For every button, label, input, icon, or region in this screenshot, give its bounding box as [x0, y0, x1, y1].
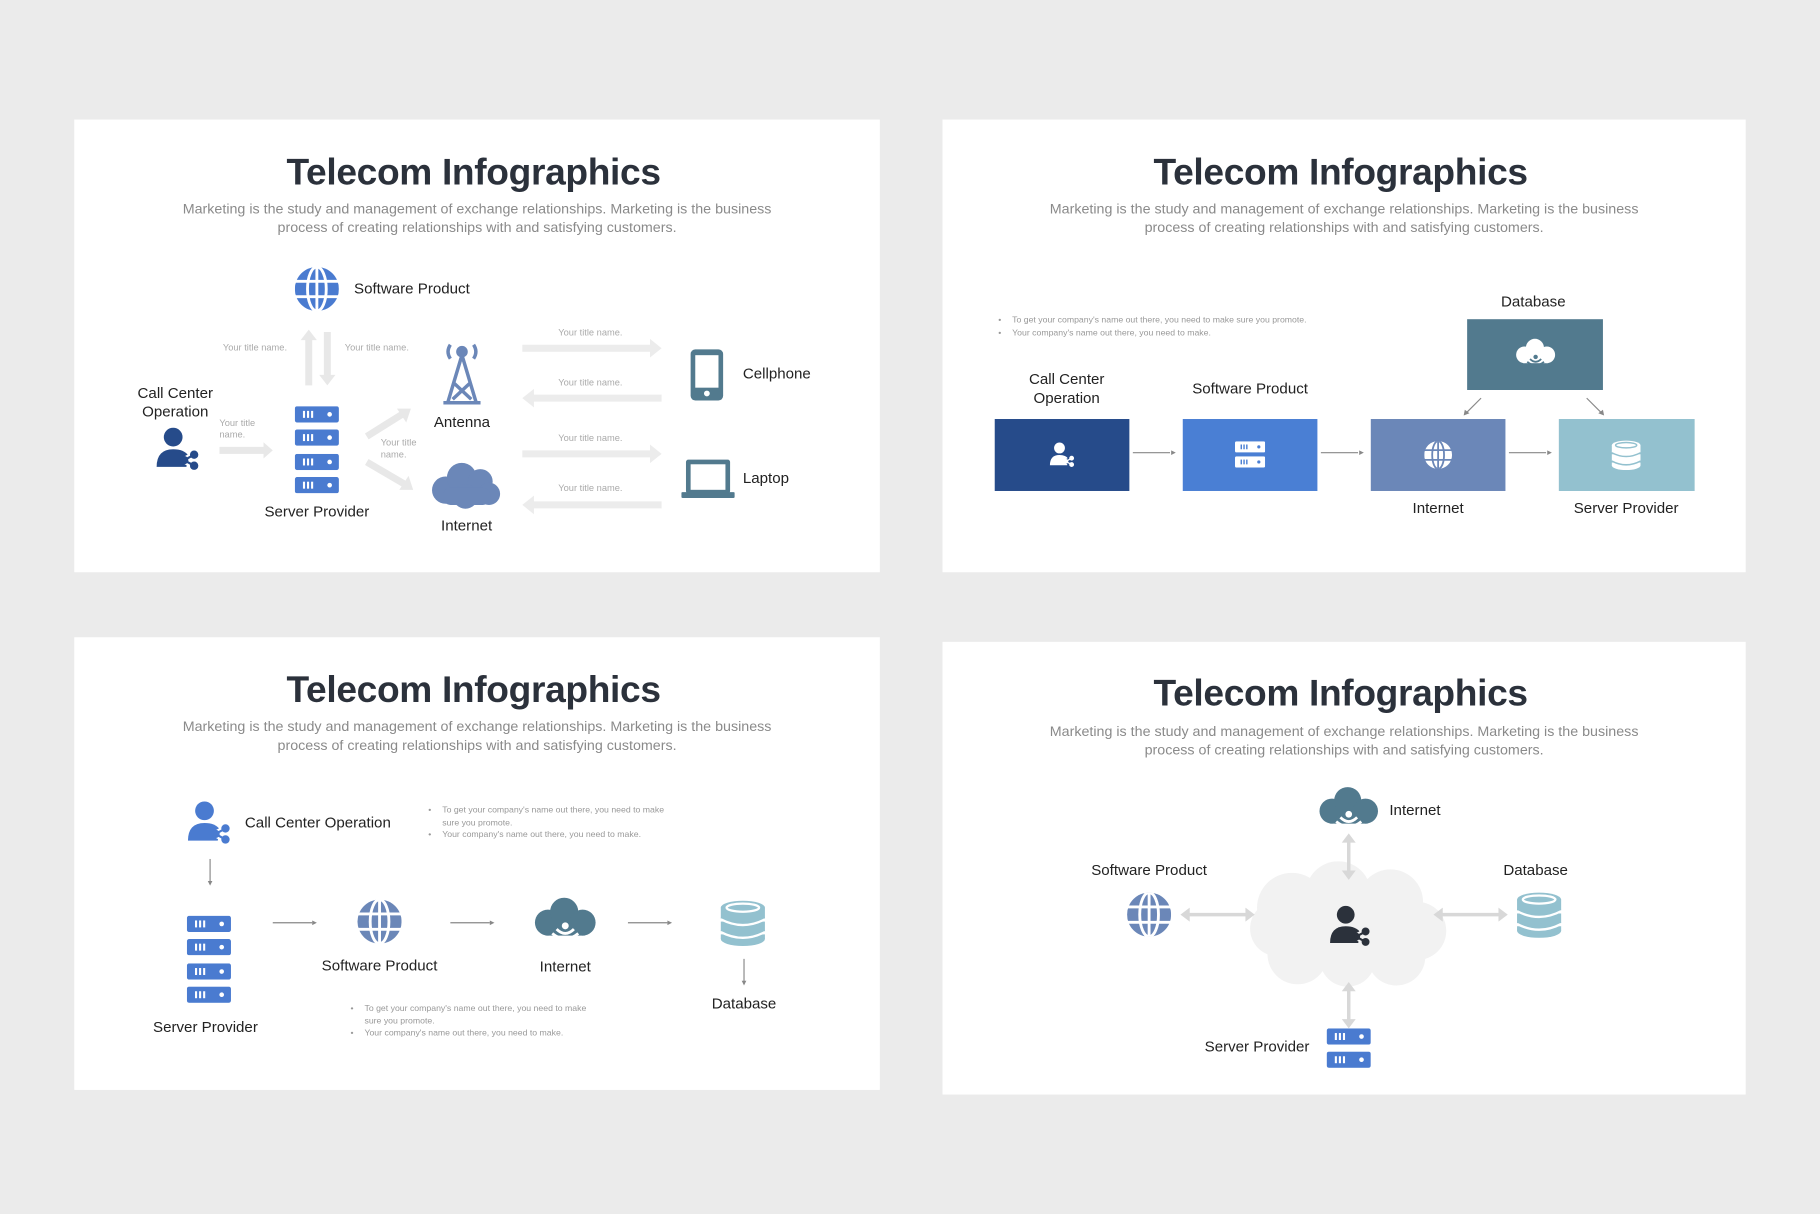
small label: Your title	[219, 418, 255, 428]
small label 4: Your title name.	[558, 483, 622, 493]
label: Internet: Internet	[1413, 499, 1464, 517]
arrow: down to database label	[742, 958, 746, 986]
icon: database	[1517, 892, 1562, 938]
panel: network diagram	[74, 120, 880, 572]
label: Server Provider: Server Provider	[153, 1018, 258, 1035]
arrows: vertical up/down	[301, 330, 335, 386]
small label right: Your title name.	[345, 342, 409, 353]
small label left: Your title name.	[223, 342, 287, 353]
arrows: right side	[522, 339, 662, 514]
title 1: Telecom Infographics	[286, 151, 661, 193]
icon: globe	[358, 900, 402, 944]
arrows: diagonal	[365, 408, 413, 490]
small label: name.	[219, 429, 245, 440]
icon: person	[156, 428, 198, 470]
bullets 2: Your company's name out there, you need to make.	[1012, 327, 1211, 337]
subtitle 4: process of creating relationships with and satisfying customers.	[1145, 741, 1544, 757]
label: Call Center Operation: Call Center	[1029, 370, 1104, 388]
bullets 3a: Your company's name out there, you need to make.	[442, 829, 641, 839]
panel: process boxes	[942, 120, 1746, 572]
title 3: Telecom Infographics	[286, 669, 661, 710]
icon: servers	[1326, 1028, 1371, 1068]
arrow: down	[208, 859, 212, 886]
small label: Your title	[381, 438, 417, 448]
label: Call Center Operation: Operation	[1034, 389, 1100, 406]
box: server provider	[1559, 419, 1695, 491]
label: Call Center Operation	[1029, 370, 1104, 406]
subtitle 2: process of creating relationships with and satisfying customers.	[1145, 219, 1544, 235]
panel: cloud hub	[942, 642, 1746, 1095]
subtitle 1: Marketing is the study and management of exchange relationships. Marketing is the business	[183, 201, 771, 217]
big cloud hub	[1250, 862, 1446, 986]
subtitle 2: Marketing is the study and management of exchange relationships. Marketing is the business	[1050, 201, 1638, 217]
label: Laptop: Laptop	[743, 469, 789, 486]
small label 1: Your title name.	[558, 327, 622, 338]
label: Call Center Operation: Operation	[142, 403, 208, 420]
panel: linear flow	[74, 637, 880, 1090]
subtitle 3: Marketing is the study and management of exchange relationships. Marketing is the business	[183, 718, 771, 735]
arrows: horizontal flow	[272, 920, 672, 925]
subtitle 4	[1050, 723, 1638, 758]
label: Software Product: Software Product	[354, 280, 470, 297]
bullets 2	[998, 315, 1307, 337]
icon: person	[188, 802, 230, 844]
box: software	[1183, 419, 1317, 491]
bullets 3b	[350, 1003, 586, 1038]
icon: laptop	[681, 460, 735, 498]
bullets 3b: To get your company's name out there, you need to make sure you promote.	[364, 1003, 586, 1025]
title 2: Telecom Infographics	[1154, 151, 1528, 193]
subtitle 2	[1050, 201, 1638, 235]
small label 3: Your title name.	[558, 433, 622, 443]
small label	[219, 418, 255, 440]
subtitle 3: process of creating relationships with and satisfying customers.	[278, 736, 677, 753]
icon: globe	[1127, 892, 1171, 937]
box: internet	[1371, 419, 1505, 491]
icon: server stack	[186, 916, 231, 1003]
arrow: to server	[220, 442, 272, 458]
subtitle 4: Marketing is the study and management of exchange relationships. Marketing is the business	[1050, 723, 1638, 739]
icon: person hub	[1330, 906, 1370, 946]
subtitle 1	[183, 201, 771, 235]
label: Internet: Internet	[1389, 801, 1441, 818]
label: Server Provider: Server Provider	[1574, 499, 1679, 517]
bullets 3a: To get your company's name out there, you need to make sure you promote.	[442, 804, 664, 827]
icon: cloud internet	[432, 462, 500, 509]
icon: cellphone	[690, 349, 724, 400]
subtitle 1: process of creating relationships with and satisfying customers.	[278, 219, 677, 235]
label: Server Provider: Server Provider	[264, 503, 369, 520]
box: call center	[995, 419, 1129, 491]
bullets 3a	[428, 804, 664, 839]
bullets 3b: Your company's name out there, you need to make.	[364, 1027, 563, 1038]
icon: database	[720, 900, 765, 946]
label: Database: Database	[1501, 292, 1566, 310]
bullets 2: To get your company's name out there, you need to make sure you promote.	[1012, 315, 1307, 325]
subtitle 3	[183, 718, 771, 753]
arrows: hub connectors	[1180, 834, 1508, 1028]
label: Call Center Operation: Call Center	[138, 384, 213, 402]
label: Internet: Internet	[540, 958, 591, 975]
icon: wifi cloud	[534, 898, 596, 936]
label: Software Product: Software Product	[322, 956, 437, 974]
small label	[381, 438, 417, 460]
label: Cellphone: Cellphone	[743, 364, 811, 382]
small label: name.	[381, 449, 407, 460]
icon: server stack	[294, 406, 339, 494]
icon: globe software product	[295, 267, 339, 311]
small label 2: Your title name.	[558, 377, 622, 388]
icon: antenna	[443, 344, 481, 404]
label: Software Product: Software Product	[1091, 861, 1207, 879]
label: Antenna: Antenna	[434, 413, 490, 431]
label: Call Center Operation	[138, 384, 213, 420]
title 4: Telecom Infographics	[1154, 672, 1528, 714]
label: Call Center Operation: Call Center Operation	[245, 814, 391, 831]
box: database	[1467, 319, 1603, 390]
icon: internet cloud	[1319, 787, 1378, 824]
label: Database: Database	[712, 995, 776, 1012]
label: Software Product: Software Product	[1192, 380, 1308, 397]
arrows: between boxes	[1132, 398, 1604, 455]
label: Database: Database	[1503, 861, 1568, 879]
label: Internet: Internet	[441, 517, 492, 534]
label: Server Provider: Server Provider	[1205, 1038, 1309, 1055]
